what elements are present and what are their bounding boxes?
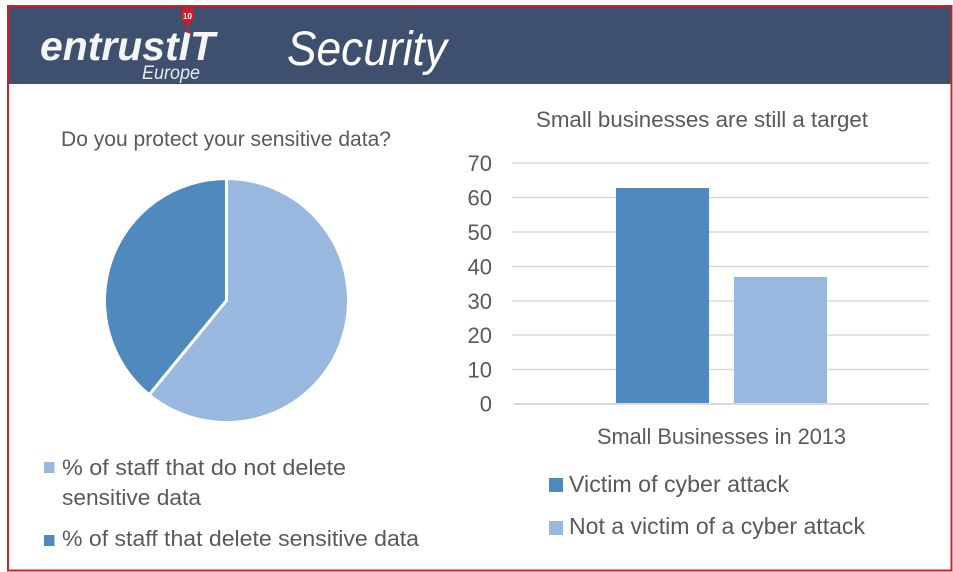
logo (40, 8, 218, 84)
pie chart heading: Do you protect your sensitive data? (61, 128, 391, 151)
y axis labels: 20 (468, 323, 492, 348)
y axis labels: 60 (468, 186, 492, 210)
y axis labels: 10 (468, 358, 492, 382)
y axis labels: 40 (468, 254, 492, 280)
icon: red balloon (180, 8, 194, 33)
legend: not a victim: Not a victim of a cyber attack (569, 513, 865, 539)
y axis labels: 0 (480, 392, 492, 416)
title: Security (287, 23, 450, 76)
panel: pie chart (44, 128, 420, 551)
y axis labels (468, 151, 492, 416)
bar: victim (616, 188, 709, 404)
legend: delete: % of staff that delete sensitive data (62, 526, 420, 551)
bar chart (468, 151, 929, 416)
panel: bar chart (468, 107, 929, 539)
bar chart heading: Small businesses are still a target (536, 107, 868, 132)
y axis labels: 30 (468, 289, 492, 314)
pie legend (44, 455, 420, 551)
pie chart (105, 178, 349, 422)
bar legend (549, 471, 865, 539)
legend: do not delete: % of staff that do not delete (62, 455, 346, 480)
legend: do not delete (44, 455, 346, 510)
logo: entrustIT (40, 23, 218, 69)
logo: Europe (142, 63, 200, 84)
y axis labels: 50 (468, 220, 492, 245)
legend: do not delete: sensitive data (62, 485, 202, 510)
y axis labels: 70 (468, 151, 492, 176)
icon: red balloon: 10 (183, 12, 192, 21)
bar: not a victim (734, 277, 827, 404)
header banner (9, 7, 951, 84)
x axis label: Small Businesses in 2013 (597, 424, 846, 449)
legend: victim: Victim of cyber attack (569, 471, 789, 497)
